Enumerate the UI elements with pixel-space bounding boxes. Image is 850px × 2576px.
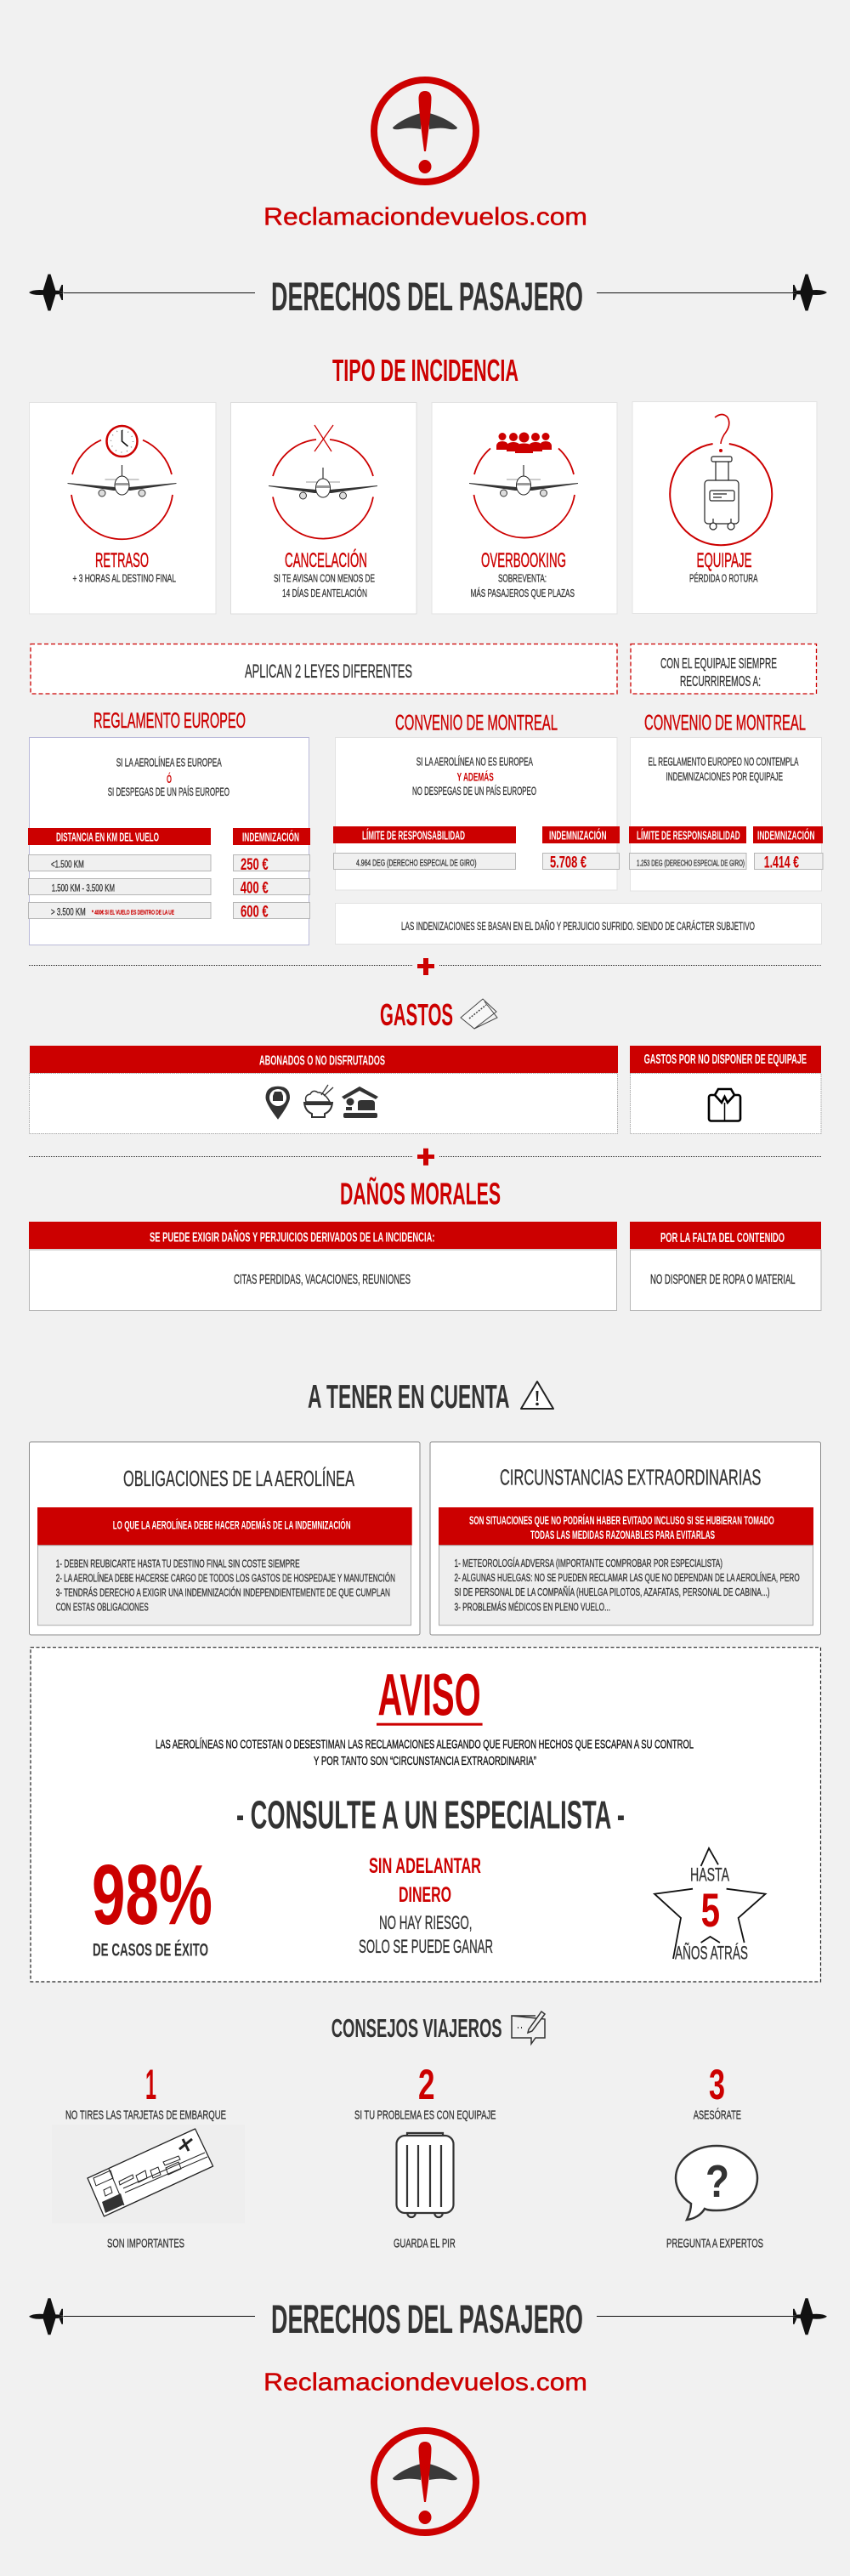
panel: convenio de montreal [333,738,620,890]
condition text [648,755,799,783]
table rows: 1.500 KM - 3.500 KM [52,884,115,894]
panel: aviso [31,1648,821,1982]
table header [28,828,310,845]
table rows: 250 € [241,856,269,874]
heading: convenio de montreal: CONVENIO DE MONTREAL [395,712,558,735]
title: derechos del pasajero: DERECHOS DEL PASAJERO [271,274,583,319]
icon: plane with cross [269,425,377,539]
icon: rice bowl [304,1085,333,1117]
panel: circunstancias extraordinarias [430,1442,821,1635]
panel: reglamento europeo [28,738,310,945]
divider plus [29,1149,822,1166]
header bar: SE PUEDE EXIGIR DAÑOS Y PERJUICIOS DERIVADOS DE LA INCIDENCIA: [150,1228,435,1245]
card description [274,571,375,599]
footer title: derechos del pasajero [29,2296,827,2341]
card title: CANCELACIÓN [285,549,367,572]
card description: + 3 HORAS AL DESTINO FINAL [73,571,176,585]
sin adelantar dinero: DINERO [399,1883,451,1907]
footer title: derechos del pasajero: DERECHOS DEL PASAJERO [271,2296,583,2341]
card title: OVERBOOKING [481,549,566,572]
icon: suitcase with question mark [670,415,772,545]
callout: aplican 2 leyes: APLICAN 2 LEYES DIFERENTES [245,661,412,682]
circumstances list: 3- PROBLEMÁS MÉDICOS EN PLENO VUELO... [454,1601,610,1614]
table rows: * 400€ SI EL VUELO ES DENTRO DE LA UE [92,909,174,916]
heading: reglamento europeo: REGLAMENTO EUROPEO [94,709,246,733]
panel: gastos por no disponer de equipaje [630,1046,821,1134]
panel: equipaje [632,401,817,614]
table header: LÍMITE DE RESPONSABILIDAD [637,829,740,843]
header bar [30,1046,618,1073]
aviso text [156,1738,694,1768]
tip 1: boarding pass [52,2061,245,2251]
panel: retraso [29,403,216,614]
panel: daños y perjuicios [29,1222,617,1311]
red banner [37,1507,412,1546]
condition text: SI LA AEROLÍNEA NO ES EUROPEA [416,755,533,769]
tip 1: boarding pass: 1 [145,2061,156,2108]
star: hasta 5 años atras: 5 [701,1883,720,1937]
tip 1: boarding pass: NO TIRES LAS TARJETAS DE EMBARQUE [65,2108,226,2123]
panel: obligaciones de la aerolinea [29,1442,420,1635]
star: hasta 5 años atras [654,1848,765,1964]
red banner: TODAS LAS MEDIDAS RAZONABLES PARA EVITARLAS [530,1529,715,1541]
sin adelantar dinero: SOLO SE PUEDE GANAR [359,1936,493,1957]
tip 3: asesorate: 3 [709,2061,725,2108]
star: hasta 5 años atras: HASTA [690,1864,729,1886]
table row [629,854,823,871]
table header [333,826,620,843]
icon: warning triangle [521,1382,553,1409]
condition text: Ó [167,771,172,786]
tip 3: asesorate [666,2061,763,2251]
obligations list: 3- TENDRÁS DERECHO A EXIGIR UNA INDEMNIZACIÓN INDEPENDIENTEMENTE DE QUE CUMPLAN [56,1586,390,1599]
condition text: SI LA AEROLÍNEA ES EUROPEA [116,756,222,769]
callout: equipaje: RECURRIREMOS A: [680,672,761,689]
icon: speech note [512,2011,545,2044]
card title: RETRASO [95,549,149,572]
tip 2: luggage: SI TU PROBLEMA ES CON EQUIPAJE [354,2108,496,2123]
footer logo [374,2431,476,2533]
icon: ticket [461,999,497,1029]
title: derechos del pasajero [29,274,827,319]
heading: gastos: GASTOS [380,997,453,1032]
callout: aplican 2 leyes [31,644,617,694]
sin adelantar dinero: SIN ADELANTAR [369,1854,481,1878]
star: hasta 5 años atras: AÑOS ATRÁS [675,1943,748,1964]
obligations list: 2- LA AEROLÍNEA DEBE HACERSE CARGO DE TODOS LOS GASTOS DE HOSPEDAJE Y MANUTENCIÓN [56,1572,395,1585]
condition text: Y ADEMÁS [457,770,494,784]
icon: suitcase [396,2133,454,2217]
top logo [374,80,476,182]
sin adelantar dinero [359,1854,493,1957]
card description: PÉRDIDA O ROTURA [689,571,758,585]
panel title: OBLIGACIONES DE LA AEROLÍNEA [123,1466,354,1491]
icon: taxi pin [265,1087,290,1120]
header bar [630,1222,821,1249]
aviso text: Y POR TANTO SON “CIRCUNSTANCIA EXTRAORDINARIA” [314,1754,536,1768]
table header: DISTANCIA EN KM DEL VUELO [56,831,159,845]
red banner: LO QUE LA AEROLÍNEA DEBE HACER ADEMÁS DE LA INDEMNIZACIÓN [113,1519,351,1532]
card description: MÁS PASAJEROS QUE PLAZAS [471,587,575,599]
callout: equipaje [631,644,816,694]
tip 2: luggage: GUARDA EL PIR [394,2237,456,2251]
table header: LÍMITE DE RESPONSABILIDAD [362,829,465,843]
table rows: > 3.500 KM [51,908,86,918]
table rows [29,855,309,922]
condition text [412,755,536,797]
circumstances list [439,1546,813,1626]
stat: 98% [92,1847,212,1960]
table row: 4.964 DEG (DERECHO ESPECIAL DE GIRO) [356,859,476,869]
panel: convenio de montreal equipaje [629,738,823,891]
panel: por la falta del contenido [630,1222,821,1311]
card description: SI TE AVISAN CON MENOS DE [274,571,375,585]
body text: CITAS PERDIDAS, VACACIONES, REUNIONES [234,1273,411,1287]
panel: abonados o no disfrutados [29,1046,618,1134]
condition text: SI DESPEGAS DE UN PAÍS EUROPEO [108,785,230,798]
table header: INDEMNIZACIÓN [549,828,607,843]
card description: 14 DÍAS DE ANTELACIÓN [282,587,367,599]
table rows: 600 € [241,904,269,922]
icon: question bubble [676,2146,757,2220]
table row: 5.708 € [550,854,586,871]
heading: tipo de incidencia: TIPO DE INCIDENCIA [332,353,518,388]
icon: hotel bed [342,1087,378,1118]
icon: shirt [709,1089,740,1121]
obligations list [37,1546,411,1626]
website name: Reclamaciondevuelos.com [264,204,587,231]
footer website name: Reclamaciondevuelos.com [264,2369,587,2396]
heading: daños morales: DAÑOS MORALES [340,1176,501,1211]
divider plus [29,958,822,975]
aviso heading [377,1662,483,1728]
table row [333,854,619,871]
header bar [29,1222,617,1249]
panel: nota indemnizaciones [335,903,821,944]
header bar: ABONADOS O NO DISFRUTADOS [259,1054,385,1069]
tip 3: asesorate: ASESÓRATE [694,2108,741,2123]
tip 2: luggage: 2 [418,2061,435,2108]
table rows: 400 € [241,879,269,898]
tip 2: luggage [354,2061,496,2251]
card title: EQUIPAJE [697,549,751,572]
stat: 98%: DE CASOS DE ÉXITO [93,1941,208,1960]
panel: cancelacion [231,403,416,614]
icon: plane with people [469,432,578,538]
stat: 98%: 98% [92,1847,212,1943]
icon: question bubble: ? [706,2156,729,2207]
header bar [630,1046,821,1073]
condition text: NO DESPEGAS DE UN PAÍS EUROPEO [412,784,536,797]
heading: a tener en cuenta: A TENER EN CUENTA [308,1379,510,1416]
red banner [439,1507,813,1546]
tip 3: asesorate: PREGUNTA A EXPERTOS [666,2237,763,2251]
card description [471,571,575,599]
icon: plane with clock [68,426,177,539]
card description: SOBREVENTA: [498,571,547,585]
condition text [108,756,230,798]
table row: 1.253 DEG (DERECHO ESPECIAL DE GIRO) [637,860,745,869]
icon: boarding pass [52,2125,245,2224]
table rows: <1.500 KM [51,860,84,871]
heading: consejos viajeros: CONSEJOS VIAJEROS [332,2013,502,2043]
table header: INDEMNIZACIÓN [242,830,299,845]
heading: consejos viajeros [332,2011,545,2044]
aviso heading: AVISO [377,1662,481,1728]
sin adelantar dinero: NO HAY RIESGO, [379,1912,473,1933]
tip 1: boarding pass: SON IMPORTANTES [107,2237,184,2251]
table row: 1.414 € [764,854,799,871]
obligations list: CON ESTAS OBLIGACIONES [56,1601,149,1614]
obligations list: 1- DEBEN REUBICARTE HASTA TU DESTINO FINAL SIN COSTE SIEMPRE [56,1558,300,1570]
panel: overbooking [432,403,617,614]
